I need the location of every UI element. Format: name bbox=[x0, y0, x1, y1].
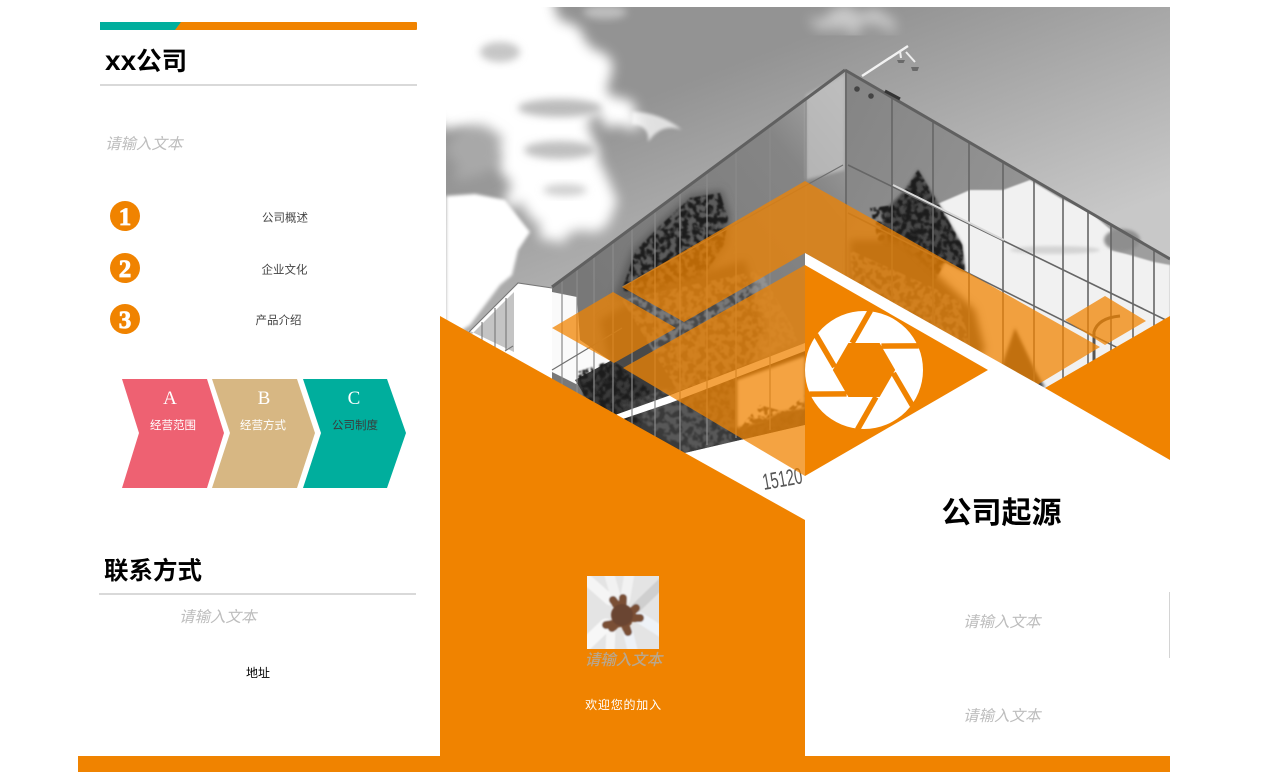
divider contact bbox=[99, 593, 416, 595]
right facade bbox=[845, 72, 1170, 316]
left mullions bbox=[552, 99, 843, 452]
chevron C: 公司制度 bbox=[332, 418, 378, 432]
lamp on roof bbox=[854, 46, 919, 99]
chevron C: C bbox=[348, 388, 360, 409]
diamond: centre bbox=[623, 265, 805, 476]
list item 2: 企业文化 bbox=[262, 262, 308, 276]
chevron B: B bbox=[258, 388, 270, 409]
top accent bar bbox=[100, 22, 417, 30]
orange triangle right bbox=[1045, 316, 1170, 460]
building number: 15120 bbox=[760, 462, 804, 495]
list item 3: 产品介绍 bbox=[256, 313, 302, 327]
list item 3 bbox=[110, 304, 302, 334]
list item 2 bbox=[110, 253, 308, 283]
chevron C bbox=[303, 379, 406, 488]
street lamp bbox=[1094, 316, 1120, 362]
bottom orange band bbox=[78, 756, 1170, 772]
icon: camera aperture bbox=[805, 310, 923, 430]
panel: building photo bbox=[446, 7, 1170, 490]
chevron A: A bbox=[163, 388, 177, 409]
right edge artefact bbox=[1169, 592, 1170, 658]
chevron A: 经营范围 bbox=[150, 418, 196, 432]
text: placeholder right 1: 请输入文本 bbox=[963, 613, 1042, 631]
chevron B: 经营方式 bbox=[240, 418, 286, 432]
left wing bbox=[470, 284, 552, 378]
divider top bbox=[100, 84, 417, 86]
diamond: small right bbox=[1065, 296, 1146, 345]
panel: orange centre bbox=[440, 316, 805, 756]
chevron A bbox=[122, 379, 224, 488]
heading: contact: 联系方式 bbox=[104, 556, 202, 585]
list item 1: 公司概述 bbox=[262, 212, 308, 224]
pine reflection bbox=[880, 170, 965, 280]
list item 1 bbox=[110, 201, 308, 231]
list item 3: 3 bbox=[119, 307, 131, 334]
image: team hands bbox=[587, 576, 659, 649]
white base bbox=[685, 425, 805, 520]
heading: origin: 公司起源 bbox=[942, 497, 1062, 530]
list item 2: 2 bbox=[119, 256, 131, 283]
lower glass, tree bbox=[575, 345, 805, 453]
translucent orange diamonds bbox=[552, 181, 1146, 476]
text: address: 地址 bbox=[246, 666, 270, 680]
tree reflection bbox=[603, 188, 768, 395]
white band bbox=[615, 343, 805, 420]
text: placeholder contact: 请输入文本 bbox=[179, 608, 258, 626]
chevron B bbox=[212, 379, 315, 488]
text: placeholder on orange: 请输入文本 bbox=[585, 651, 665, 669]
heading: company name: xx公司 bbox=[105, 45, 187, 76]
text: placeholder right 2: 请输入文本 bbox=[963, 707, 1042, 725]
text: welcome: 欢迎您的加入 bbox=[585, 697, 662, 712]
left facade upper glass bbox=[552, 70, 845, 416]
diamond: small left bbox=[552, 292, 676, 363]
orange triangle with camera icon bbox=[805, 265, 988, 476]
diamond: large upper bbox=[622, 181, 1100, 385]
list item 1: 1 bbox=[119, 204, 131, 231]
text: placeholder top: 请输入文本 bbox=[105, 135, 184, 153]
white lower-right panel bbox=[805, 253, 1170, 756]
clouds bbox=[420, 0, 894, 340]
